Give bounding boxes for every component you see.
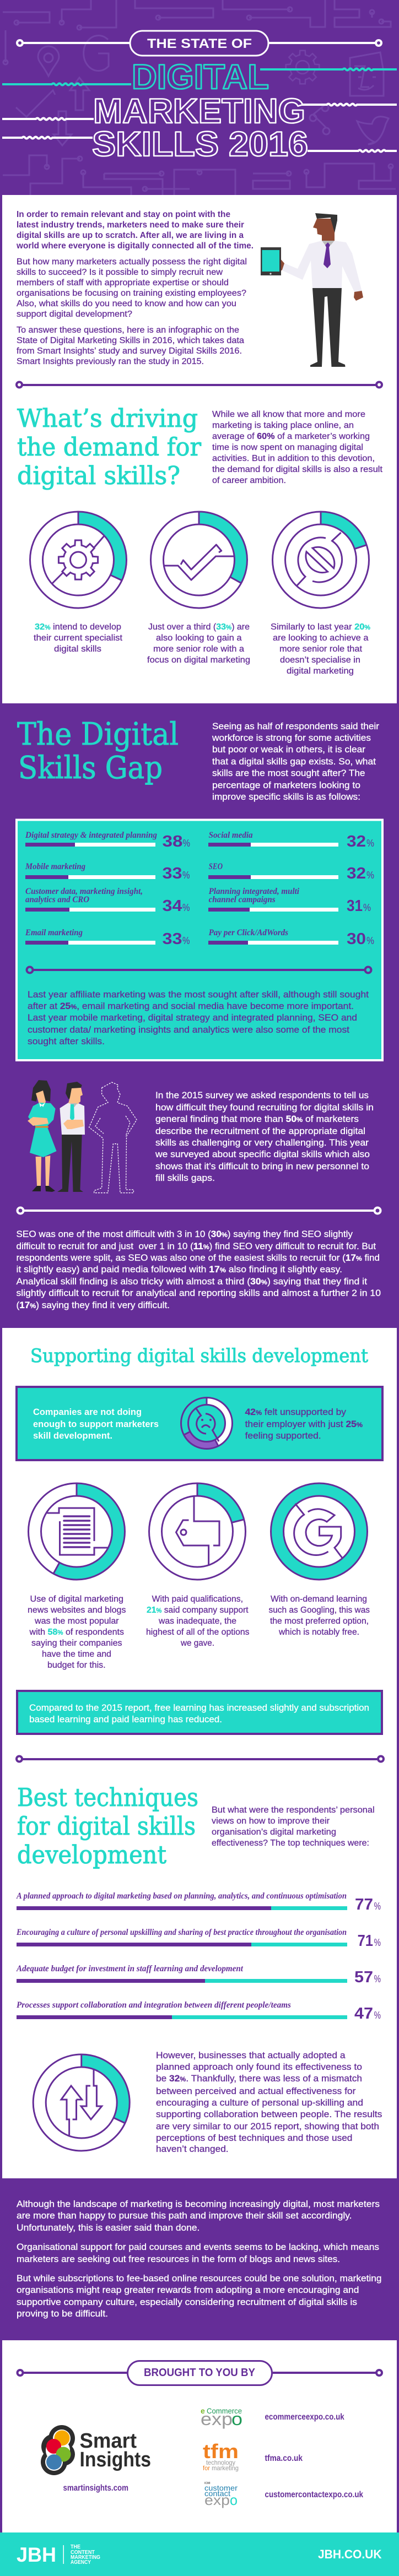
text: skills gap intro: but poor or weak in others, it is clear <box>212 745 366 755</box>
callout text right: their employer with just 25% <box>245 1419 363 1429</box>
text: seo recruiting: Analytical skill finding is also tricky with almost a third ( 30%) saying that they find it <box>17 1277 367 1287</box>
bar: email marketing 33%: % <box>182 935 190 946</box>
title line: marketing <box>2 92 397 131</box>
text: 2015 survey: general finding that more than 50% of marketers <box>155 1114 359 1124</box>
bar: culture of upskilling 71%: % <box>374 1937 381 1948</box>
bar: seo 32%: SEO <box>209 862 223 871</box>
logo: ecommerce expo <box>201 2406 242 2429</box>
text: conclusion paragraph 1: Unfortunately, this is easier said than done. <box>17 2223 199 2233</box>
text: personal views: But what were the respondents’ personal <box>212 1805 375 1815</box>
heading: what's driving the demand: What’s driving <box>17 404 198 433</box>
caption: 58% blogs: Use of digital marketing <box>30 1595 123 1604</box>
bar: pay per click 30%: % <box>366 935 374 946</box>
text: demand intro: marketing is taking place online, an <box>212 421 354 430</box>
title pill: the state of <box>17 31 381 56</box>
intro paragraph 3: Smart Insights previously ran the study in 2015. <box>17 357 204 366</box>
text: planned approach effectiveness: haven’t changed. <box>156 2144 229 2154</box>
panel: footer <box>0 2532 399 2576</box>
bar: email marketing 33%: Email marketing <box>25 928 83 937</box>
caption: 21% paid qualifications <box>146 1595 249 1648</box>
text: personal views: organisation’s digital marketing <box>212 1827 336 1837</box>
logo: jbh the content marketing agency: CONTENT <box>71 2549 95 2556</box>
bar: seo 32%: 32 <box>347 865 366 882</box>
intro paragraph 2: support digital development? <box>17 310 132 319</box>
text: personal views: views on how to improve their <box>212 1816 330 1826</box>
caption: on-demand learning <box>269 1595 370 1637</box>
bar: email marketing 33% <box>25 928 190 948</box>
text: seo recruiting <box>17 1229 381 1310</box>
intro paragraph 2: organisations be focusing on training existing employees? <box>17 289 246 298</box>
bar: customer data 34%: analytics and CRO <box>25 895 89 904</box>
background circuit pattern <box>3 0 396 195</box>
text: planned approach effectiveness: perceptions of best techniques and those used <box>156 2133 352 2143</box>
divider inside box <box>26 967 371 973</box>
callout text right: feeling supported. <box>245 1431 321 1441</box>
url: smartinsights.com: smartinsights.com <box>63 2483 128 2493</box>
caption: 58% blogs: budget for this. <box>47 1661 106 1670</box>
caption: 33% just over a third <box>147 622 250 665</box>
text: demand intro: time is now spent on managing digital <box>212 443 363 452</box>
intro paragraph 2: Also, what skills do you need to know and how can you <box>17 299 236 308</box>
caption: 20% similarly to last year: digital marketing <box>287 666 354 676</box>
intro paragraph 3: State of Digital Marketing Skills in 2016, which takes data <box>17 336 244 345</box>
caption: 20% similarly to last year: doesn’t specialise in <box>280 655 360 665</box>
bar: collaboration processes 47%: 47 <box>354 2005 373 2022</box>
bar: planned approach 77%: A planned approach to digital marketing based on planning, analytics, and continuous optimisation <box>16 1891 347 1901</box>
text: conclusion paragraph 2 <box>17 2242 379 2264</box>
heading: what's driving the demand: the demand for <box>17 432 201 462</box>
logo: jbh the content marketing agency <box>17 2544 100 2566</box>
logo: jbh the content marketing agency: THE <box>71 2544 80 2550</box>
caption: 21% paid qualifications: With paid qualifications, <box>152 1595 243 1604</box>
text: conclusion paragraph 3: proving to be difficult. <box>17 2309 108 2319</box>
heading: supporting digital skills development: Supporting digital skills development <box>30 1345 368 1367</box>
panel: header <box>2 0 397 195</box>
caption: 32% intend to develop <box>34 622 123 654</box>
bar: customer data 34%: Customer data, marketing insight, <box>25 887 143 896</box>
bar: customer data 34%: % <box>182 902 190 913</box>
heading: the digital skills gap <box>17 717 179 786</box>
text: planned approach effectiveness: between perceived and actual effectiveness for <box>156 2086 356 2096</box>
bar: culture of upskilling 71%: 71 <box>358 1932 373 1950</box>
caption: 58% blogs <box>28 1595 126 1670</box>
caption: 58% blogs: with 58% of respondents <box>29 1628 124 1637</box>
text: 2015 survey: we surveyed about specific digital skills which also <box>155 1149 370 1159</box>
logo: ecommerce expo: Commerce <box>207 2406 242 2415</box>
text: demand intro: of career ambition. <box>212 476 286 485</box>
text: skills gap intro: skills are the most sought after? The <box>212 768 365 778</box>
logo: customer contact expo <box>204 2482 238 2508</box>
text: 2015 survey: describe the recruitment of the appropriate digital <box>155 1126 365 1136</box>
callout text right <box>245 1407 363 1441</box>
bar: pay per click 30%: Pay per Click/AdWords <box>209 928 288 937</box>
caption: on-demand learning: which is notably free. <box>278 1628 359 1637</box>
title line: digital <box>2 58 397 96</box>
ring chart: 32% arrows <box>33 2054 130 2151</box>
logo: jbh the content marketing agency: AGENCY <box>71 2559 91 2566</box>
caption: 20% similarly to last year: are looking to achieve a <box>273 633 369 643</box>
callout: compared to 2015 <box>17 1691 382 1734</box>
bar: pay per click 30%: 30 <box>347 930 366 948</box>
text: demand intro: While we all know that more and more <box>212 410 365 419</box>
heading: the digital skills gap: Skills Gap <box>18 750 163 786</box>
bar: digital strategy 38%: Digital strategy & integrated planning <box>25 831 157 840</box>
bar: customer data 34% <box>25 887 190 915</box>
text: seo recruiting: it slightly easy) and paid media followed with 17% also finding it slightly easy. <box>17 1265 342 1275</box>
caption: 32% intend to develop: their current specialist <box>34 633 123 643</box>
text: demand intro: the demand for digital skills is also a result <box>212 465 383 474</box>
pill: brought to you by <box>18 2361 382 2385</box>
text: 2015 survey: skills as challenging or very challenging. This year <box>155 1138 369 1148</box>
caption: 20% similarly to last year <box>271 622 370 676</box>
text: planned approach effectiveness: are very similar to our 2015 report, showing that both <box>156 2122 379 2132</box>
bar: social media 32%: Social media <box>209 831 253 840</box>
ring chart: 21% tag <box>149 1483 246 1580</box>
logo: tfm <box>203 2440 239 2472</box>
caption: 21% paid qualifications: was inadequate, the <box>158 1617 236 1626</box>
bar: adequate budget 57% <box>16 1964 381 1986</box>
caption: 58% blogs: news websites and blogs <box>28 1606 126 1615</box>
caption: 32% intend to develop: digital skills <box>54 644 101 654</box>
heading: best techniques: Best techniques <box>17 1783 198 1812</box>
intro lead text: In order to remain relevant and stay on point with the <box>17 210 230 219</box>
bar: culture of upskilling 71%: Encouraging a culture of personal upskilling and sharing of best practice throughout the organisation <box>16 1928 347 1937</box>
caption: 21% paid qualifications: we gave. <box>180 1639 214 1648</box>
logo: tfm: for marketing <box>203 2464 239 2472</box>
text: planned approach effectiveness: encouraging a culture of personal up-skilling and <box>156 2098 363 2108</box>
bar: email marketing 33%: 33 <box>162 930 182 948</box>
ring chart: 33% check <box>151 512 247 608</box>
bar: planned approach 77%: 77 <box>355 1896 373 1913</box>
illustration: man holding phone <box>261 213 363 367</box>
text: 2015 survey: shows that it’s difficult to bring in new personnel to <box>155 1162 369 1172</box>
heading: what's driving the demand: digital skills? <box>17 461 180 490</box>
text: conclusion paragraph 2: Organisational support for paid courses and events seems to be lacking, which means <box>17 2242 379 2252</box>
bar: planned approach 77%: % <box>374 1901 381 1912</box>
text: affiliate marketing: customer data/ marketing insights and analytics were also some of the most <box>28 1025 349 1035</box>
pill: brought to you by: BROUGHT TO YOU BY <box>144 2367 256 2379</box>
caption: 21% paid qualifications: highest of all of the options <box>146 1628 249 1637</box>
box: skills bar chart <box>17 820 382 1060</box>
ring chart: 20% no sign <box>272 512 369 608</box>
bar: planning integrated 31%: % <box>363 902 371 913</box>
bar: collaboration processes 47% <box>17 2000 381 2022</box>
logo: customer contact expo: customer <box>204 2483 238 2492</box>
intro lead text <box>16 210 254 251</box>
text: skills gap intro: percentage of marketers looking to <box>212 780 360 790</box>
heading: best techniques: for digital skills <box>17 1812 196 1841</box>
bar: mobile marketing 33%: % <box>182 870 190 881</box>
logo: tfm: technology <box>206 2459 235 2466</box>
text: skills gap intro <box>212 722 380 802</box>
bar: seo 32%: % <box>366 870 374 881</box>
title pill: the state of: THE STATE OF <box>147 36 252 51</box>
text: 2015 survey: how difficult they found recruiting for digital skills in <box>155 1103 374 1113</box>
bar: digital strategy 38%: 38 <box>162 833 183 850</box>
bar: social media 32%: 32 <box>347 833 366 850</box>
url: customercontactexpo: customercontactexpo.co.uk <box>265 2490 363 2499</box>
caption: 33% just over a third: more senior role with a <box>153 644 244 654</box>
caption: 58% blogs: was the most popular <box>34 1617 119 1626</box>
logo: customer contact expo: o <box>230 2492 238 2508</box>
bar: culture of upskilling 71% <box>16 1928 381 1950</box>
callout text left: skill development. <box>33 1431 112 1441</box>
text: planned approach effectiveness: be 32%. Thankfully, there was less of a mismatch <box>156 2074 362 2084</box>
divider <box>18 1207 380 1214</box>
heading: best techniques: development <box>17 1840 166 1869</box>
bar: mobile marketing 33%: 33 <box>162 865 182 882</box>
caption: on-demand learning: With on-demand learning <box>271 1595 367 1604</box>
text: skills gap intro: that a digital skills gap exists. So, what <box>212 757 376 767</box>
text: affiliate marketing: after at 25%, email marketing and social media have become more important. <box>28 1001 354 1011</box>
caption: 32% intend to develop: 32% intend to develop <box>35 622 121 632</box>
url: ecommerceexpo: ecommerceexpo.co.uk <box>265 2412 344 2422</box>
intro lead text: latest industry trends, marketers need to make sure their <box>17 220 244 230</box>
url: jbh.co.uk: JBH.CO.UK <box>318 2547 382 2561</box>
panel: the digital skills gap <box>17 717 382 1310</box>
logo: smart insights: Smart <box>79 2429 137 2453</box>
heading: best techniques <box>17 1783 198 1869</box>
bar: digital strategy 38% <box>25 831 190 850</box>
caption: 33% just over a third: focus on digital marketing <box>147 655 250 665</box>
bar: planned approach 77% <box>16 1891 381 1913</box>
intro paragraph 2: But how many marketers actually possess the right digital <box>17 257 247 267</box>
divider <box>17 1756 384 1761</box>
logo: customer contact expo: ICMI <box>204 2482 211 2485</box>
text: 2015 survey: fill skills gaps. <box>155 1173 215 1183</box>
text: affiliate marketing: Last year mobile marketing, digital strategy and integrated planning, SEO and <box>28 1013 357 1023</box>
bar: mobile marketing 33%: Mobile marketing <box>25 862 85 871</box>
text: seo recruiting: difficult to recruit for and just over 1 in 10 ( 11%) find SEO very difficult to recruit for. But <box>17 1241 376 1251</box>
text: conclusion paragraph 3: supportive company culture, especially considering recruitment of digital skills is <box>17 2297 357 2307</box>
text: personal views <box>212 1805 375 1848</box>
panel: conclusion <box>17 2199 381 2319</box>
text: seo recruiting: (17%) saying they find it very difficult. <box>17 1300 170 1310</box>
ring chart: 42% unsupported sad face <box>181 1397 233 1449</box>
text: 2015 survey: In the 2015 survey we asked respondents to tell us <box>155 1091 369 1100</box>
text: seo recruiting: respondents were split, as SEO was also one of the easiest skills to recruit for ( 17% find <box>17 1253 380 1263</box>
text: 2015 survey <box>155 1091 374 1183</box>
text: seo recruiting: slightly difficult to recruit for analytical and reporting skills and almost a further 2 in 10 <box>17 1288 381 1298</box>
text: affiliate marketing <box>28 990 369 1046</box>
caption: 58% blogs: have the time and <box>42 1650 111 1659</box>
text: planned approach effectiveness: supporting collaboration between people. The results <box>156 2109 382 2119</box>
text: conclusion paragraph 1: Although the landscape of marketing is becoming increasingly digital, most marketers <box>17 2199 380 2209</box>
bar: planning integrated 31%: Planning integrated, multi <box>209 887 300 896</box>
logo: customer contact expo: contact <box>204 2489 230 2498</box>
bar: customer data 34%: 34 <box>162 897 182 915</box>
intro lead text: world where everyone is digitally connected all of the time. <box>16 241 254 251</box>
bar: planning integrated 31% <box>208 887 371 915</box>
intro paragraph 3 <box>17 326 244 366</box>
text: affiliate marketing: Last year affiliate marketing was the most sought after skill, although still sought <box>28 990 369 1000</box>
bar: adequate budget 57%: % <box>374 1973 381 1984</box>
bar: collaboration processes 47%: % <box>374 2010 381 2021</box>
callout text left: Companies are not doing <box>33 1407 142 1417</box>
bar: social media 32% <box>208 831 374 850</box>
ring chart: 58% document <box>29 1483 125 1580</box>
caption: 20% similarly to last year: Similarly to last year 20% <box>271 622 370 632</box>
logo: smart insights <box>41 2425 151 2475</box>
caption: 58% blogs: saying their companies <box>31 1639 122 1648</box>
panel: intro <box>2 195 397 703</box>
text: planned approach effectiveness: planned approach only found its effectiveness to <box>156 2062 362 2072</box>
caption: 33% just over a third: Just over a third (33%) are <box>148 622 250 632</box>
logo: ecommerce expo: e <box>201 2406 205 2415</box>
text: affiliate marketing: sought after skills. <box>28 1037 105 1046</box>
text: skills gap intro: workforce is strong for some activities <box>212 733 371 743</box>
text: demand intro: activities. But in addition to this devotion, <box>212 454 375 463</box>
text: seo recruiting: SEO was one of the most difficult with 3 in 10 ( 30%) saying they find SEO slightly <box>17 1229 353 1239</box>
text: conclusion paragraph 3: organisations might reap greater rewards from adopting a more encouraging and <box>17 2285 359 2295</box>
callout text right: 42% felt unsupported by <box>245 1407 347 1417</box>
callout text left: enough to support marketers <box>33 1419 159 1429</box>
divider <box>17 382 382 388</box>
text: conclusion paragraph 1 <box>17 2199 380 2233</box>
intro paragraph 3: To answer these questions, here is an infographic on the <box>17 326 239 335</box>
bar: collaboration processes 47%: Processes support collaboration and integration between different people/teams <box>17 2000 291 2010</box>
text: demand intro <box>212 410 383 485</box>
panel: supporting digital skills development <box>2 1328 397 2178</box>
title line: skills 2016 <box>2 125 397 164</box>
text: conclusion paragraph 3 <box>17 2274 381 2319</box>
logo: customer contact expo: exp <box>204 2492 230 2508</box>
ring chart: 32% gear <box>30 512 127 608</box>
callout: compared to 2015: based learning and paid learning has reduced. <box>29 1715 222 1724</box>
bar: digital strategy 38%: % <box>183 838 190 849</box>
text: conclusion paragraph 3: But while subscriptions to fee-based online resources could be one solution, marketing <box>17 2274 381 2284</box>
title line: digital: DIGITAL <box>132 58 269 96</box>
ring chart: full google <box>271 1483 367 1580</box>
caption: on-demand learning: the most preferred option, <box>270 1617 369 1626</box>
bar: social media 32%: % <box>366 838 374 849</box>
intro paragraph 2: members of staff with appropriate expertise or should <box>17 278 229 288</box>
bar: mobile marketing 33% <box>25 862 190 882</box>
url: tfma: tfma.co.uk <box>265 2454 303 2463</box>
logo: smart insights: Insights <box>79 2448 151 2471</box>
text: planned approach effectiveness: However, businesses that actually adopted a <box>156 2051 346 2060</box>
title line: skills 2016: SKILLS 2016 <box>92 125 308 164</box>
title line: marketing: MARKETING <box>93 92 305 131</box>
callout text left <box>33 1407 159 1441</box>
text: conclusion paragraph 2: marketers are seeking out free resources in the form of blogs and news sites. <box>17 2254 340 2264</box>
text: conclusion paragraph 1: are more than happy to pursue this path and improve their skill set accordingly. <box>17 2211 352 2221</box>
panel: sponsors <box>2 2340 397 2532</box>
logo: ecommerce expo: o <box>231 2409 242 2429</box>
bar: pay per click 30% <box>208 928 374 948</box>
caption: 21% paid qualifications: 21% said company support <box>147 1606 249 1615</box>
caption: on-demand learning: such as Googling, this was <box>269 1606 370 1615</box>
text: personal views: effectiveness? The top techniques were: <box>212 1839 369 1848</box>
intro paragraph 2: skills to succeed? Is it possible to simply recruit new <box>17 268 223 277</box>
bar: adequate budget 57%: 57 <box>354 1968 373 1986</box>
callout: companies not doing enough <box>17 1387 382 1460</box>
intro paragraph 3: from Smart Insights’ study and survey Digital Skills 2016. <box>17 346 242 356</box>
illustration: woman, man and dashed missing person <box>28 1080 137 1193</box>
logo: jbh the content marketing agency: JBH <box>17 2544 56 2566</box>
text: planned approach effectiveness <box>156 2051 382 2154</box>
heading: the digital skills gap: The Digital <box>17 717 179 752</box>
caption: 20% similarly to last year: more senior role that <box>279 644 363 654</box>
bar: seo 32% <box>208 862 374 882</box>
bar: planning integrated 31%: channel campaigns <box>209 895 276 904</box>
logo: tfm: tfm <box>203 2440 239 2463</box>
bar: planning integrated 31%: 31 <box>347 897 363 915</box>
caption: 33% just over a third: also looking to gain a <box>156 633 242 643</box>
intro paragraph 2 <box>17 257 247 319</box>
text: demand intro: average of 60% of a marketer’s working <box>212 432 370 441</box>
logo: jbh the content marketing agency: MARKETING <box>71 2554 100 2561</box>
logo: ecommerce expo: exp <box>201 2409 233 2429</box>
intro lead text: digital skills are up to scratch. After all, we are living in a <box>17 231 244 240</box>
heading: what's driving the demand <box>17 404 201 490</box>
bar: adequate budget 57%: Adequate budget for investment in staff learning and development <box>16 1964 244 1973</box>
text: skills gap intro: improve specific skills is as follows: <box>212 792 360 802</box>
text: skills gap intro: Seeing as half of respondents said their <box>212 722 380 731</box>
callout: compared to 2015: Compared to the 2015 report, free learning has increased slightly and subscription <box>29 1703 369 1713</box>
